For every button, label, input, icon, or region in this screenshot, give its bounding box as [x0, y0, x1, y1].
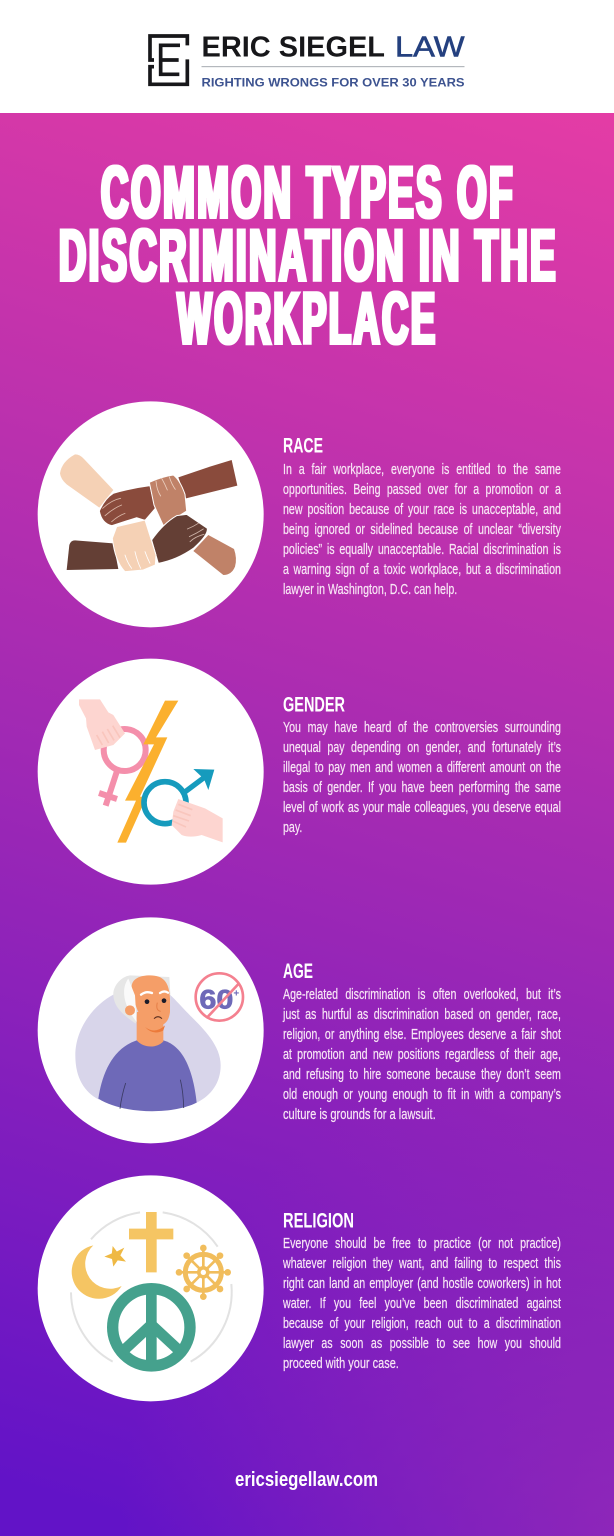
text: gender: pay. — [283, 820, 302, 836]
text: gender: level of work as your male colleagues, you deserve equal — [283, 800, 561, 816]
panel: gender — [38, 658, 561, 885]
logo wordmark: law: LAW — [395, 32, 465, 64]
text: race: being ignored or sidelined because of unclear “diversity — [283, 522, 561, 538]
logo: Eric Siegel Law — [148, 32, 465, 90]
heading: age: AGE — [283, 959, 313, 983]
icon: religious symbols — [38, 1175, 264, 1402]
text: age: and refusing to hire someone because they don’t seem — [283, 1067, 561, 1083]
text: race: new position because of your race is unacceptable, and — [283, 502, 561, 518]
text: age: old enough or young enough to fit in with a company’s — [283, 1087, 561, 1103]
text: religion: whatever religion they want, and failing to respect this — [283, 1256, 561, 1272]
text: gender: basis of gender. If you have been performing the same — [283, 780, 561, 796]
icon: no 60 plus sign: + — [233, 989, 239, 1000]
text: age: Age-related discrimination is often overlooked, but it’s — [283, 987, 561, 1003]
text: religion: Everyone should be free to practice (or not practice) — [283, 1236, 561, 1252]
heading: religion: RELIGION — [283, 1209, 354, 1233]
text: race: a warning sign of a toxic workplace, but a discrimination — [283, 562, 561, 578]
text: age: religion, or anything else. Employees deserve a fair shot — [283, 1027, 561, 1043]
icon: older man with no 60+ sign — [38, 917, 264, 1144]
logo wordmark: ERIC SIEGEL — [202, 32, 385, 64]
logo mark: E monogram — [150, 36, 187, 84]
icon: four interlocked hands — [38, 401, 264, 628]
icon: no 60 plus sign — [196, 973, 243, 1021]
text: gender — [283, 720, 561, 836]
heading: race: RACE — [283, 434, 323, 458]
panel: religion — [38, 1175, 561, 1402]
text: race: In a fair workplace, everyone is entitled to the same — [283, 462, 561, 478]
text: religion: lawyer as soon as possible to see how you should — [283, 1336, 561, 1352]
text: religion: proceed with your case. — [283, 1356, 399, 1372]
text: race — [283, 462, 561, 598]
text: gender: unequal pay depending on gender, and fortunately it’s — [283, 740, 561, 756]
text: gender: You may have heard of the controversies surrounding — [283, 720, 561, 736]
text: age: culture is grounds for a lawsuit. — [283, 1107, 436, 1123]
icon: gender symbols split by lightning — [38, 658, 264, 885]
text: gender: illegal to pay men and women a different amount on the — [283, 760, 561, 776]
text: race: opportunities. Being passed over for a promotion or a — [283, 482, 561, 498]
text: religion: water. If you feel you’ve been discriminated against — [283, 1296, 561, 1312]
heading: gender: GENDER — [283, 693, 345, 717]
text: race: policies” is equally unacceptable. Racial discrimination is — [283, 542, 561, 558]
text: religion: because of your religion, reach out to a discrimination — [283, 1316, 561, 1332]
text: age: at promotion and new positions regardless of their age, — [283, 1047, 561, 1063]
icon: no 60 plus sign: 60 — [199, 985, 233, 1015]
panel: race — [38, 401, 561, 628]
logo tagline: RIGHTING WRONGS FOR OVER 30 YEARS — [202, 76, 464, 90]
text: age — [282, 987, 561, 1123]
header: logo band — [0, 0, 614, 113]
text: age: just as hurtful as discrimination based on gender, race, — [283, 1007, 561, 1023]
title — [59, 152, 558, 360]
panel: age — [38, 917, 561, 1144]
text: religion: right can land an employer (and hostile coworkers) in hot — [283, 1276, 561, 1292]
text: race: lawyer in Washington, D.C. can help. — [283, 582, 457, 598]
text: religion — [282, 1236, 561, 1372]
